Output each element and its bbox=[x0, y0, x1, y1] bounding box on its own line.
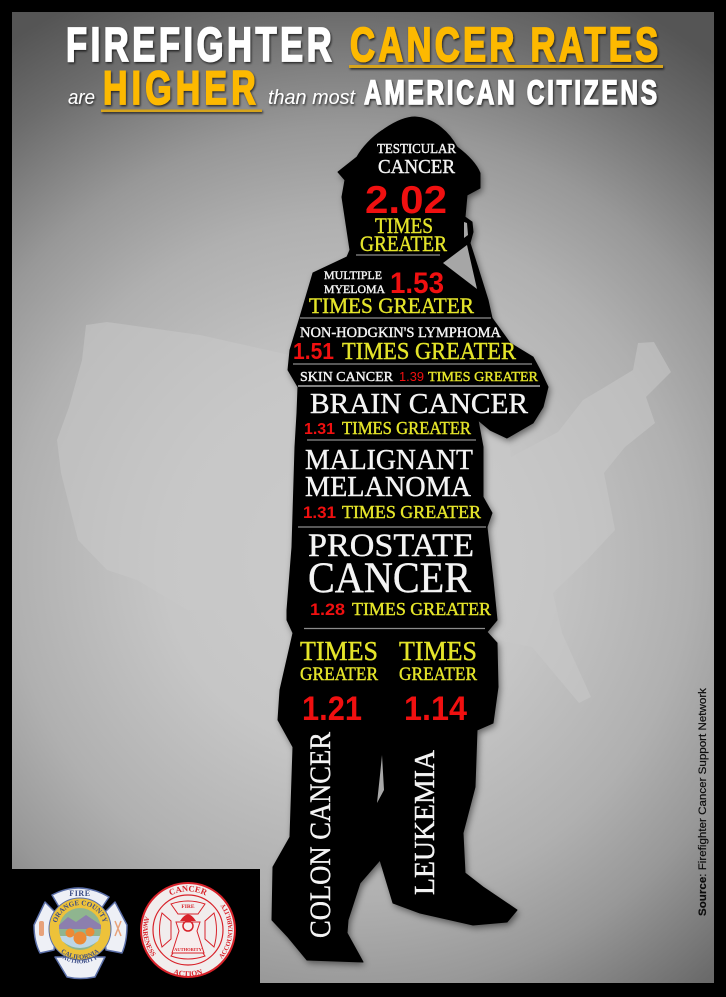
brain cancer: BRAIN CANCER bbox=[310, 388, 529, 420]
non-hodgkin's lymphoma: 1.51 bbox=[293, 338, 334, 364]
title: AMERICAN CITIZENS bbox=[364, 74, 657, 112]
colon cancer: COLON CANCER bbox=[304, 732, 337, 938]
prostate cancer: PROSTATE bbox=[308, 528, 474, 564]
title: are bbox=[68, 87, 95, 109]
gap between the strap and the shoulder bbox=[443, 245, 477, 289]
testicular cancer: GREATER bbox=[360, 231, 447, 256]
title: HIGHER bbox=[103, 62, 256, 114]
logo panel bbox=[0, 869, 260, 997]
gap between the legs bbox=[377, 755, 384, 803]
prostate cancer: 1.28 bbox=[310, 600, 345, 619]
leukemia: GREATER bbox=[399, 664, 477, 685]
testicular cancer: TESTICULAR bbox=[377, 142, 457, 157]
non-hodgkin's lymphoma: TIMES GREATER bbox=[342, 339, 516, 365]
prostate cancer bbox=[304, 528, 491, 628]
title: than most bbox=[268, 87, 356, 109]
leukemia: LEUKEMIA bbox=[410, 749, 441, 895]
testicular cancer: 2.02 bbox=[365, 179, 447, 222]
colon cancer: 1.21 bbox=[302, 690, 362, 728]
logo: cancer awareness: AWARENESS bbox=[143, 916, 156, 956]
colon cancer: TIMES bbox=[300, 636, 378, 666]
skin cancer: TIMES GREATER bbox=[428, 370, 539, 385]
skin cancer: 1.39 bbox=[399, 369, 424, 384]
multiple myeloma: TIMES GREATER bbox=[309, 293, 474, 318]
logo: Orange County Fire Authority: AUTHORITY bbox=[62, 955, 97, 964]
logo: cancer awareness: AUTHORITY bbox=[174, 947, 203, 952]
testicular cancer: CANCER bbox=[378, 156, 456, 178]
non-hodgkin's lymphoma: NON-HODGKIN'S LYMPHOMA bbox=[300, 325, 501, 341]
logo: Orange County Fire Authority: CALIFORNIA bbox=[62, 950, 100, 959]
testicular cancer: TIMES bbox=[375, 213, 433, 238]
colon cancer bbox=[300, 636, 378, 938]
non-hodgkin's lymphoma bbox=[293, 325, 532, 365]
prostate cancer: TIMES GREATER bbox=[352, 599, 491, 619]
multiple myeloma bbox=[300, 267, 491, 318]
brain cancer: 1.31 bbox=[304, 421, 335, 438]
multiple myeloma: 1.53 bbox=[390, 267, 444, 300]
source credit: Source: Firefighter Cancer Support Network bbox=[697, 687, 709, 916]
malignant melanoma bbox=[298, 444, 486, 527]
brain cancer bbox=[304, 388, 529, 440]
brain cancer: TIMES GREATER bbox=[342, 418, 471, 438]
malignant melanoma: MALIGNANT bbox=[305, 444, 473, 476]
logo: cancer awareness: ACCOUNTABILITY bbox=[220, 904, 232, 959]
malignant melanoma: TIMES GREATER bbox=[342, 502, 481, 522]
prostate cancer: CANCER bbox=[308, 555, 471, 602]
logo: Orange County Fire Authority: ORANGE COUNTY bbox=[53, 900, 108, 922]
logo: cancer awareness: ACTION bbox=[174, 969, 202, 976]
leukemia bbox=[399, 636, 477, 895]
malignant melanoma: 1.31 bbox=[303, 503, 336, 522]
logo: cancer awareness: CANCER bbox=[169, 886, 206, 896]
multiple myeloma: MYELOMA bbox=[324, 282, 385, 296]
firefighter silhouette bbox=[272, 117, 548, 962]
firefighter silhouette shadow bbox=[274, 120, 550, 965]
leukemia: TIMES bbox=[399, 636, 477, 666]
title: FIREFIGHTER bbox=[66, 17, 332, 71]
skin cancer: SKIN CANCER bbox=[300, 370, 394, 385]
title: CANCER RATES bbox=[350, 17, 658, 71]
testicular cancer bbox=[356, 142, 457, 256]
leukemia: 1.14 bbox=[404, 690, 467, 728]
colon cancer: GREATER bbox=[300, 664, 378, 685]
logo: cancer awareness bbox=[140, 882, 236, 978]
skin cancer bbox=[298, 369, 540, 386]
malignant melanoma: MELANOMA bbox=[305, 471, 471, 503]
logo: cancer awareness: FIRE bbox=[181, 904, 195, 910]
logo: Orange County Fire Authority: FIRE bbox=[69, 889, 91, 898]
logo: Orange County Fire Authority bbox=[33, 887, 128, 980]
slit between the strap and the neck bbox=[464, 222, 468, 238]
title bbox=[66, 17, 663, 114]
map of the United States bbox=[57, 322, 671, 703]
multiple myeloma: MULTIPLE bbox=[324, 268, 382, 282]
